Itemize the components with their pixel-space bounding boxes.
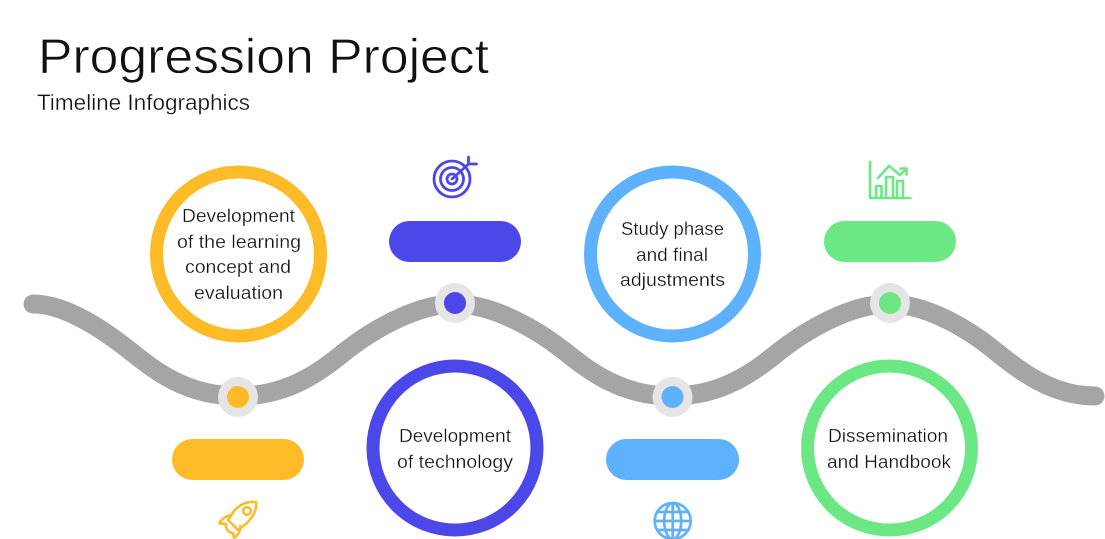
panel: step 1 circle: Development [182,206,295,226]
icon: growth chart [870,162,910,198]
panel: step 4 circle: and Handbook [827,452,952,472]
panel: step 1 circle: evaluation [194,283,283,303]
panel: step 2 circle: Development [399,426,511,446]
node 1 [218,377,258,417]
panel: step 4 circle: Dissemination [828,426,948,446]
icon: globe [655,503,691,539]
panel: step 4 circle [808,366,972,530]
panel: step 2 circle: of technology [397,452,513,472]
timeline wave [33,304,1095,396]
pill: yellow [172,439,304,480]
panel: step 1 circle: concept and [185,257,291,277]
node 4 [870,283,910,323]
icon: rocket [220,502,256,538]
icon: target [434,157,476,197]
title: Progression Project [38,30,489,84]
panel: step 3 circle [590,172,754,336]
panel: step 1 circle [156,172,320,336]
pill: light blue [606,439,739,480]
node 3 [652,377,692,417]
panel: step 3 circle: Study phase [621,219,724,239]
node 2 [435,283,475,323]
pill: green [824,221,956,262]
panel: step 3 circle: and final [636,245,708,265]
pill: indigo [389,221,521,262]
panel: step 2 circle [373,366,537,530]
panel: step 3 circle: adjustments [620,270,725,290]
panel: step 1 circle: of the learning [177,232,301,252]
subtitle: Timeline Infographics [37,90,250,115]
